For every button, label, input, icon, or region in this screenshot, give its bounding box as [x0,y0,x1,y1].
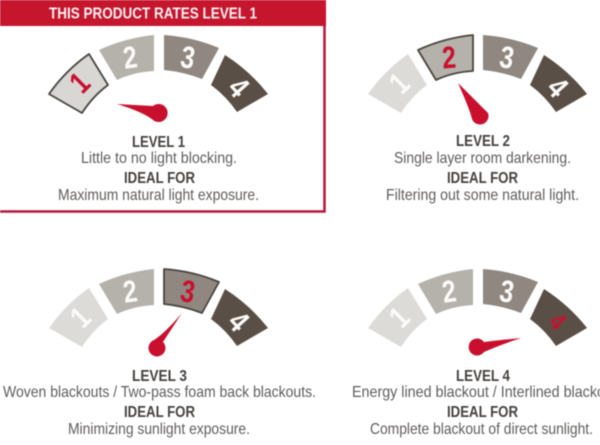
text: level 4: LEVEL 4 [456,368,510,385]
segment 2 [99,269,154,314]
segment 3 [483,269,538,313]
header banner [0,0,326,26]
segment 2 active [418,35,473,80]
segment 4: 4 [221,71,256,104]
text: level 1: Maximum natural light exposure. [58,187,259,204]
text: level 3: LEVEL 3 [132,368,187,385]
gauge: level 4 [368,269,587,356]
panel: this product rates level 1 [0,0,326,212]
needle [469,338,521,356]
text: level 2 [386,133,579,204]
segment 4 [211,55,268,112]
segment 4 [530,55,587,112]
segment 3: 3 [497,39,517,76]
text: level 2: IDEAL FOR [447,170,518,187]
text: level 3: Minimizing sunlight exposure. [68,421,250,438]
segment 2 active: 2 [441,40,457,75]
gauge: level 1 [49,35,268,122]
segment 2: 2 [121,274,139,309]
needle [117,104,168,122]
needle [148,313,182,356]
segment 2: 2 [440,274,458,309]
segment 1 active: 1 [63,66,97,100]
segment 2: 2 [121,40,139,75]
segment 1 [368,54,427,113]
segment 3: 3 [497,273,517,310]
header banner: THIS PRODUCT RATES LEVEL 1 [49,6,257,22]
segment 4: 4 [540,71,575,104]
segment 2 [418,269,473,314]
text: level 1 [58,134,259,204]
segment 3 [483,35,538,79]
text: level 2: Filtering out some natural light. [386,187,579,204]
segment 4: 4 [221,305,256,338]
text: level 1: Little to no light blocking. [81,150,237,167]
text: level 3: Woven blackouts / Two-pass foam back blackouts. [3,384,316,401]
text: level 1: LEVEL 1 [132,134,185,151]
text: level 3 [3,368,316,438]
gauge: level 2 [368,35,587,125]
segment 1 active [49,54,108,113]
segment 1: 1 [63,300,97,334]
segment 2 [99,35,154,80]
segment 1: 1 [382,300,416,334]
segment 1 [368,288,427,347]
segment 4 active [530,289,587,346]
segment 1: 1 [382,66,416,100]
text: level 4: IDEAL FOR [447,404,518,421]
text: level 1: IDEAL FOR [124,170,195,187]
segment 3: 3 [178,39,198,76]
gauge: level 3 [49,269,268,356]
text: level 4 [352,368,600,438]
needle [458,83,489,125]
text: level 3: IDEAL FOR [124,404,195,421]
segment 3 [164,35,219,79]
segment 1 [49,288,108,347]
segment 3 active [164,269,219,313]
text: level 2: Single layer room darkening. [394,150,571,167]
text: level 2: LEVEL 2 [456,133,510,150]
segment 4 active: 4 [543,308,572,335]
segment 4 [211,289,268,346]
segment 3 active: 3 [178,273,198,310]
